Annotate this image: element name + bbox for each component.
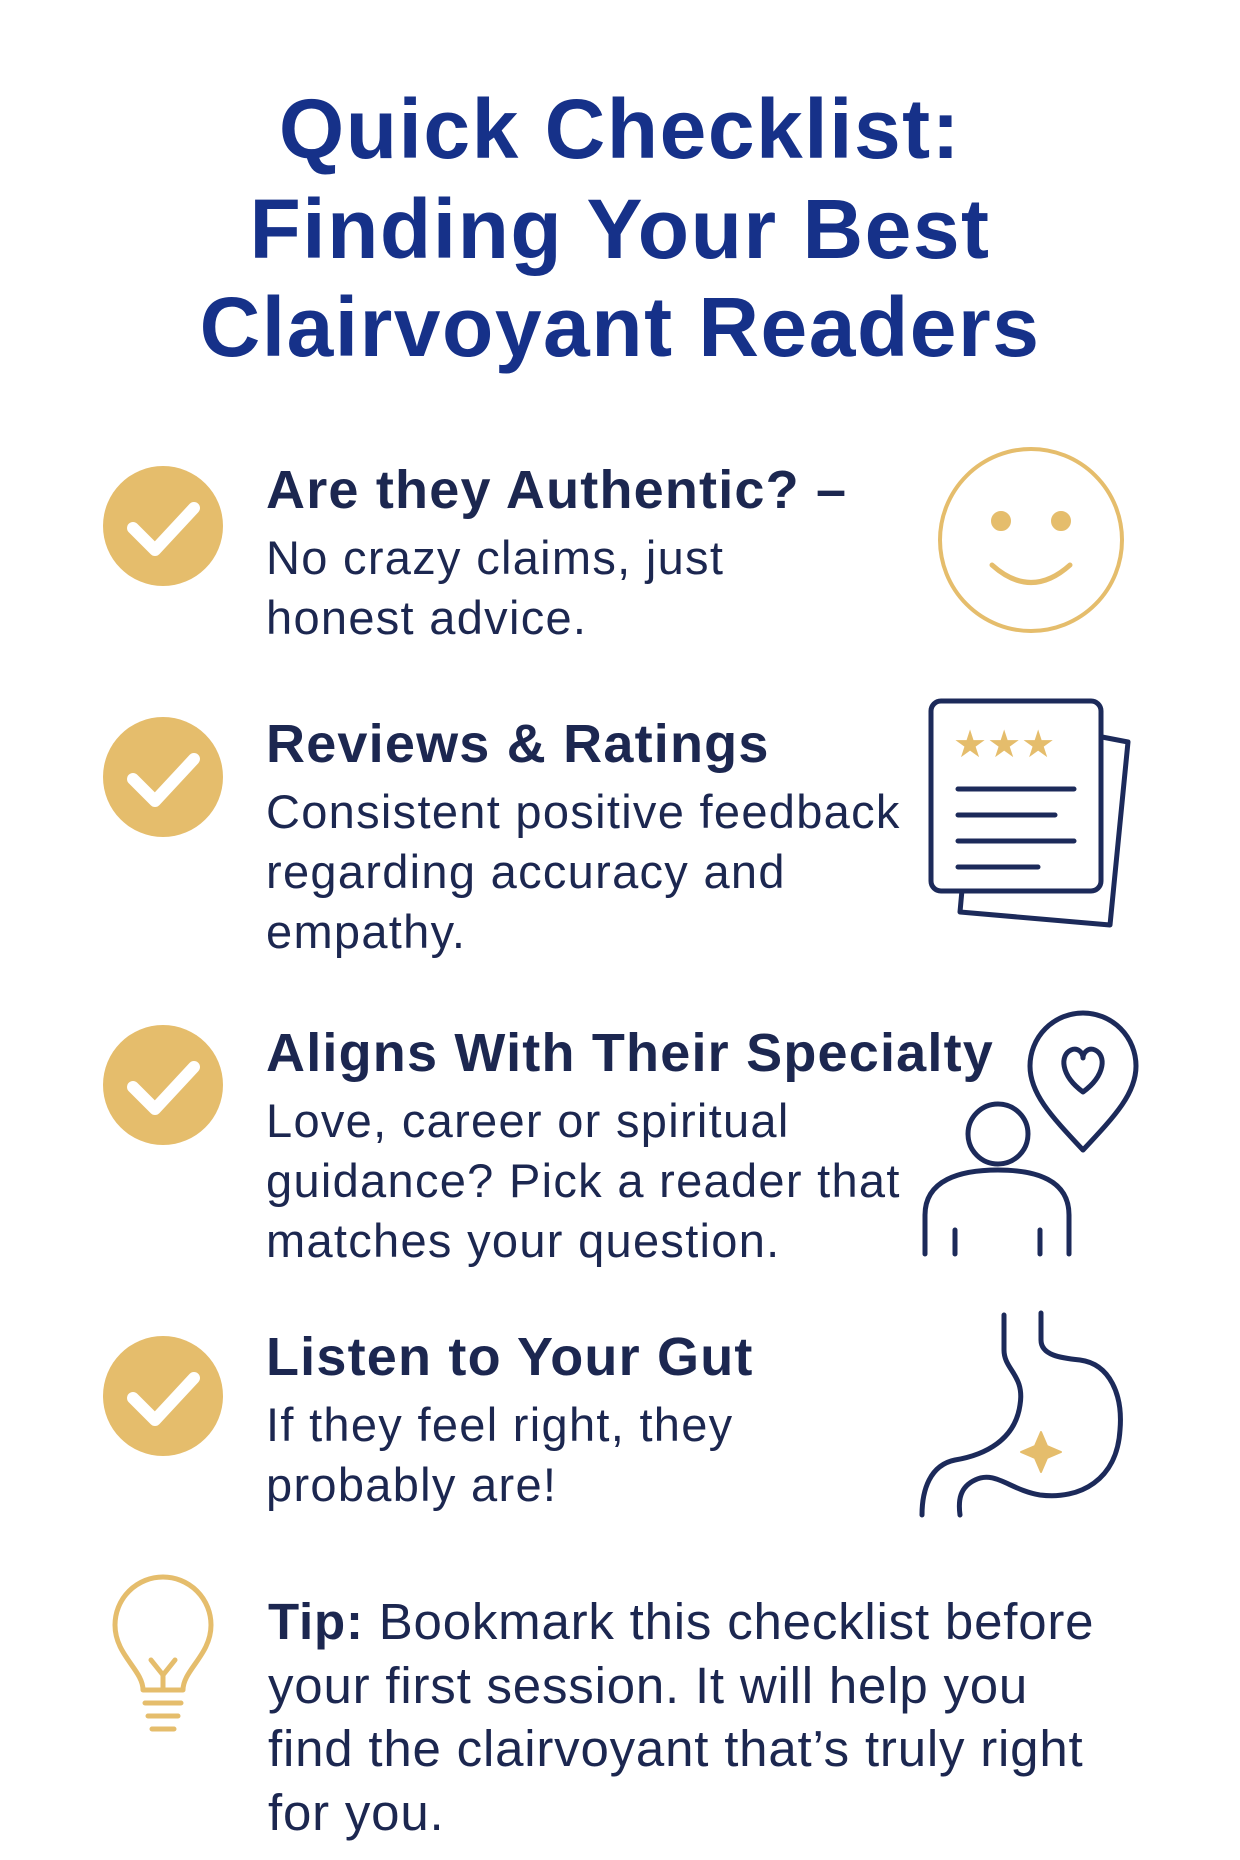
item 3 text: matches your question.	[266, 1214, 781, 1267]
title: Clairvoyant Readers	[200, 280, 1040, 374]
icon: check 4	[103, 1336, 223, 1456]
item 2 text: Consistent positive feedback	[266, 785, 901, 838]
tip text: for you.	[268, 1784, 444, 1840]
icon: review document	[931, 701, 1128, 925]
item 3 text: Aligns With Their Specialty	[266, 1023, 994, 1083]
icon: light bulb	[115, 1577, 211, 1729]
item 1 text: Are they Authentic? –	[266, 460, 847, 520]
item 3 text	[266, 1023, 994, 1267]
item 1 text: No crazy claims, just	[266, 531, 724, 584]
item 2 text	[266, 714, 901, 958]
icon: review document: ★★★	[953, 722, 1055, 766]
tip text: your first session. It will help you	[268, 1656, 1028, 1714]
item 2 text: empathy.	[266, 905, 466, 958]
title: Finding Your Best	[249, 182, 991, 276]
icon: check 3	[103, 1025, 223, 1145]
item 1 text: honest advice.	[266, 591, 587, 644]
title	[200, 82, 1040, 374]
icon: smiley	[940, 449, 1122, 631]
item 4 text: If they feel right, they	[266, 1398, 734, 1451]
icon: check 2	[103, 717, 223, 837]
tip text: Tip: Bookmark this checklist before	[268, 1593, 1094, 1650]
item 4 text	[266, 1327, 754, 1511]
icon: stomach	[922, 1313, 1120, 1515]
tip text	[268, 1593, 1094, 1840]
item 3 text: guidance? Pick a reader that	[266, 1154, 901, 1207]
title: Quick Checklist:	[279, 82, 961, 176]
icon: check 1	[103, 466, 223, 586]
item 2 text: Reviews & Ratings	[266, 714, 770, 774]
tip text: find the clairvoyant that’s truly right	[268, 1720, 1083, 1777]
item 3 text: Love, career or spiritual	[266, 1094, 790, 1147]
item 4 text: probably are!	[266, 1458, 557, 1511]
item 4 text: Listen to Your Gut	[266, 1327, 754, 1387]
item 1 text	[266, 460, 847, 644]
item 2 text: regarding accuracy and	[266, 845, 786, 898]
icon: person with heart pin	[925, 1013, 1136, 1254]
